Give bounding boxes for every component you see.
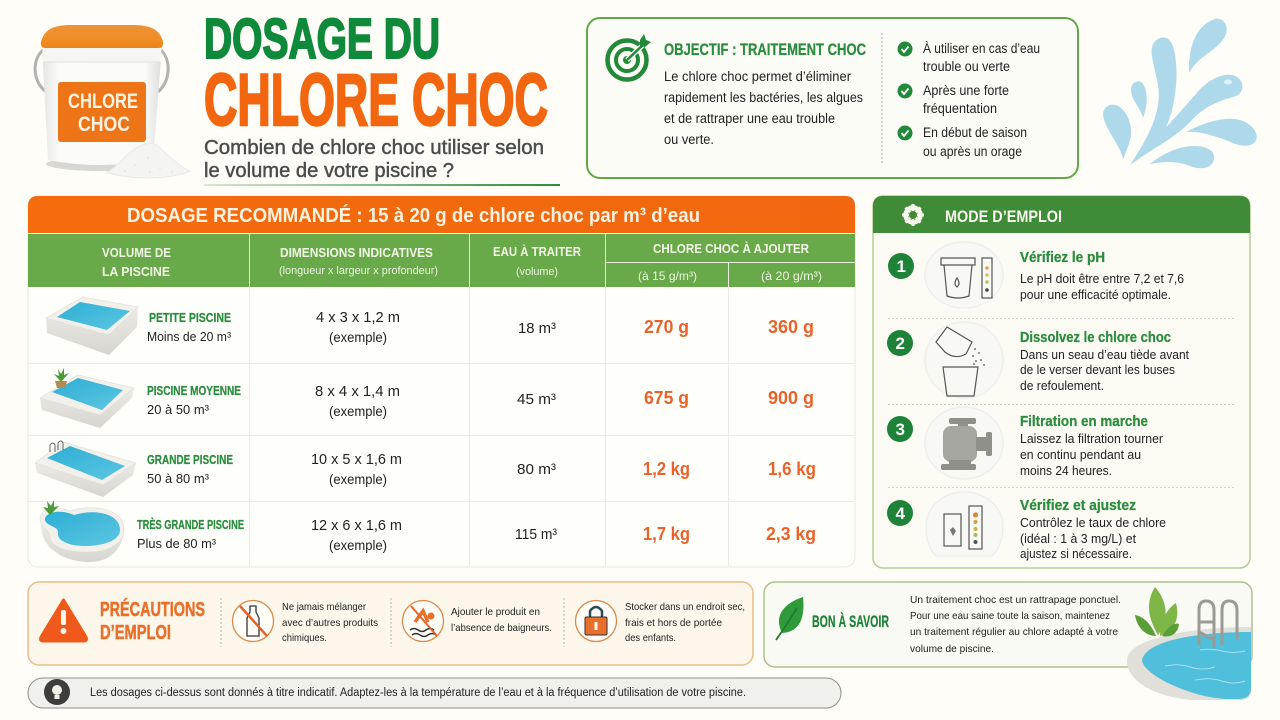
table column headers xyxy=(28,234,855,287)
title: DOSAGE DU xyxy=(204,7,440,71)
step 4: 4 xyxy=(896,504,906,523)
step 1 xyxy=(888,242,1184,308)
panel: précautions xyxy=(28,582,753,665)
step 2: Dissolvez le chlore choc xyxy=(1020,330,1171,346)
precaution: no mixing: avec d’autres produits xyxy=(282,617,378,629)
icon: crossed bottle xyxy=(232,600,274,642)
objectif description: ou verte. xyxy=(664,132,714,147)
row: petite piscine: 360 g xyxy=(768,317,814,337)
row: piscine moyenne: 45 m³ xyxy=(517,391,556,408)
row: piscine moyenne xyxy=(40,368,814,428)
table column headers: (à 15 g/m³) xyxy=(638,269,697,283)
row: très grande piscine: TRÈS GRANDE PISCINE xyxy=(137,517,244,532)
row: piscine moyenne: (exemple) xyxy=(329,403,387,419)
checklist: Après une forte xyxy=(923,83,1009,98)
row: grande piscine: 80 m³ xyxy=(517,461,556,478)
row: grande piscine: 50 à 80 m³ xyxy=(147,471,210,486)
precaution: no mixing xyxy=(232,600,378,644)
bon à savoir text xyxy=(910,594,1121,655)
icon: target xyxy=(608,34,651,80)
step 3: 3 xyxy=(896,420,905,439)
icon: test tube and strip xyxy=(926,492,1003,556)
step 1: pour une efficacité optimale. xyxy=(1020,288,1171,302)
step 4: Vérifiez et ajustez xyxy=(1020,498,1136,514)
panel: bon à savoir: BON À SAVOIR xyxy=(812,612,889,631)
step 3: en continu pendant au xyxy=(1020,448,1141,462)
table banner: DOSAGE RECOMMANDÉ : 15 à 20 g de chlore choc par m³ d’eau xyxy=(127,204,700,227)
title xyxy=(204,7,548,141)
step 3: moins 24 heures. xyxy=(1020,464,1112,478)
icon: crossed swimmer xyxy=(402,600,444,642)
row: piscine moyenne: 8 x 4 x 1,4 m xyxy=(315,383,400,400)
step 4: (idéal : 1 à 3 mg/L) et xyxy=(1020,532,1137,546)
row: très grande piscine xyxy=(40,500,816,562)
checklist: fréquentation xyxy=(923,101,997,116)
icon: gear xyxy=(902,204,924,226)
icon: water splash xyxy=(1103,19,1257,168)
table column headers: VOLUME DE xyxy=(102,245,171,260)
checklist: trouble ou verte xyxy=(923,59,1010,74)
panel: mode d'emploi xyxy=(873,196,1250,568)
icon: pouring powder into bucket xyxy=(925,322,1003,398)
table banner xyxy=(28,196,855,233)
illustration: corner pool with ladder and plant xyxy=(1127,587,1251,700)
subtitle: Combien de chlore choc utiliser selon xyxy=(204,136,544,159)
bon à savoir text: un traitement régulier au chlore adapté à votre xyxy=(910,626,1118,638)
row: petite piscine: PETITE PISCINE xyxy=(149,310,231,325)
icon: bucket and pH strip xyxy=(925,242,1003,308)
row: petite piscine xyxy=(46,297,814,355)
step 1: Vérifiez le pH xyxy=(1020,250,1105,266)
row: petite piscine: 18 m³ xyxy=(518,320,556,337)
mode d'emploi header xyxy=(873,196,1250,233)
mode d'emploi header: MODE D’EMPLOI xyxy=(945,207,1062,226)
table column headers: LA PISCINE xyxy=(102,264,170,279)
precaution: storage: frais et hors de portée xyxy=(625,617,722,629)
précautions heading: D’EMPLOI xyxy=(100,622,171,644)
bon à savoir text: volume de piscine. xyxy=(910,643,994,655)
precaution: no mixing: chimiques. xyxy=(282,632,327,644)
icon: padlock xyxy=(576,600,616,642)
table column headers: EAU À TRAITER xyxy=(493,244,582,259)
footnote xyxy=(28,678,841,708)
step 1: Le pH doit être entre 7,2 et 7,6 xyxy=(1020,272,1184,286)
row: grande piscine: (exemple) xyxy=(329,471,387,487)
precaution: storage: des enfants. xyxy=(625,632,676,644)
bon à savoir text: Pour une eau saine toute la saison, maintenez xyxy=(910,610,1110,622)
row: grande piscine: 10 x 5 x 1,6 m xyxy=(311,451,402,468)
step 2: 2 xyxy=(896,334,905,353)
row: piscine moyenne: 20 à 50 m³ xyxy=(147,402,210,417)
panel: dosage table xyxy=(28,196,855,567)
objectif description: Le chlore choc permet d’éliminer xyxy=(664,69,851,84)
step 1: 1 xyxy=(896,257,906,276)
table column headers: (longueur x largeur x profondeur) xyxy=(279,265,438,277)
step 3: Filtration en marche xyxy=(1020,414,1148,430)
step 4: ajustez si nécessaire. xyxy=(1020,547,1132,561)
icon: chlorine bucket with powder: CHOC xyxy=(78,113,130,136)
objectif description xyxy=(664,69,863,147)
step 4: Contrôlez le taux de chlore xyxy=(1020,516,1166,530)
table column headers: (volume) xyxy=(516,266,558,278)
row: grande piscine xyxy=(35,441,816,497)
row: très grande piscine: Plus de 80 m³ xyxy=(137,536,217,551)
précautions heading: PRÉCAUTIONS xyxy=(100,598,205,621)
row: petite piscine: (exemple) xyxy=(329,329,387,345)
row: petite piscine: 270 g xyxy=(644,317,689,337)
step 3: Laissez la filtration tourner xyxy=(1020,432,1163,446)
step 2: Dans un seau d’eau tiède avant xyxy=(1020,348,1190,362)
row: très grande piscine: 2,3 kg xyxy=(766,524,816,544)
panel: bon à savoir xyxy=(764,582,1252,667)
row: très grande piscine: 1,7 kg xyxy=(643,524,690,544)
icon: medium pool xyxy=(40,368,134,428)
row: piscine moyenne: 675 g xyxy=(644,388,689,408)
step 3 xyxy=(887,407,1163,479)
subtitle xyxy=(204,136,560,186)
row: très grande piscine: 12 x 6 x 1,6 m xyxy=(311,517,402,534)
precaution: storage: Stocker dans un endroit sec, xyxy=(625,601,745,613)
precaution: storage xyxy=(576,600,745,644)
row: grande piscine: GRANDE PISCINE xyxy=(147,452,233,467)
icon: light bulb xyxy=(44,679,70,705)
icon: filtration pump xyxy=(925,407,1003,479)
checklist: En début de saison xyxy=(923,125,1027,140)
row: petite piscine: 4 x 3 x 1,2 m xyxy=(316,309,400,326)
step 2: de refoulement. xyxy=(1020,379,1104,393)
footnote: Les dosages ci-dessus sont donnés à titre indicatif. Adaptez-les à la température de l’eau et à la fréquence d’utilisation de votre piscine. xyxy=(90,687,746,699)
checklist: À utiliser en cas d’eau xyxy=(923,41,1040,56)
step 4 xyxy=(887,492,1166,561)
icon: leaf xyxy=(776,597,803,640)
bucket label: CHLORE xyxy=(68,90,138,113)
icon: large pool xyxy=(35,441,136,497)
row: grande piscine: 1,6 kg xyxy=(768,459,816,479)
table column headers: CHLORE CHOC À AJOUTER xyxy=(653,241,810,256)
precaution: no mixing: Ne jamais mélanger xyxy=(282,601,366,613)
checklist xyxy=(898,41,1040,159)
step 2: de le verser devant les buses xyxy=(1020,363,1175,377)
row: très grande piscine: 115 m³ xyxy=(515,526,557,543)
step 2 xyxy=(887,322,1190,398)
icon: very large kidney pool xyxy=(40,500,124,562)
row: grande piscine: 1,2 kg xyxy=(643,459,690,479)
precaution: no swimmers xyxy=(402,600,552,642)
précautions heading xyxy=(100,598,205,644)
row: piscine moyenne: PISCINE MOYENNE xyxy=(147,383,241,398)
row: piscine moyenne: 900 g xyxy=(768,388,814,408)
icon: warning triangle xyxy=(41,600,86,641)
checklist: ou après un orage xyxy=(923,144,1022,159)
bon à savoir text: Un traitement choc est un rattrapage ponctuel. xyxy=(910,594,1121,606)
icon: small pool xyxy=(46,297,138,355)
objectif description: rapidement les bactéries, les algues xyxy=(664,90,863,105)
title: CHLORE CHOC xyxy=(204,60,548,141)
row: très grande piscine: (exemple) xyxy=(329,537,387,553)
panel: objectif xyxy=(587,18,1078,178)
subtitle: le volume de votre piscine ? xyxy=(204,159,454,182)
objectif description: et de rattraper une eau trouble xyxy=(664,111,835,126)
row: petite piscine: Moins de 20 m³ xyxy=(147,329,232,344)
precaution: no swimmers: Ajouter le produit en xyxy=(451,606,540,618)
icon: chlorine bucket with powder xyxy=(35,25,190,178)
objectif heading: OBJECTIF : TRAITEMENT CHOC xyxy=(664,40,866,59)
table column headers: (à 20 g/m³) xyxy=(761,269,822,283)
table column headers: DIMENSIONS INDICATIVES xyxy=(280,245,433,260)
precaution: no swimmers: l’absence de baigneurs. xyxy=(451,622,552,634)
